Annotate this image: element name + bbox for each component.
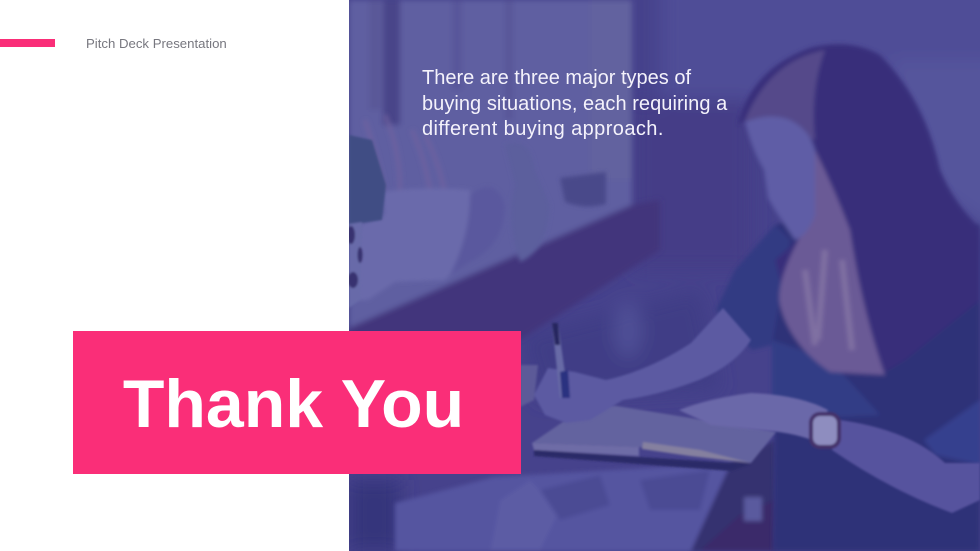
intro paragraph: buying situations, each requiring a	[422, 92, 727, 114]
window and sill	[349, 0, 660, 340]
deck label: Pitch Deck Presentation	[86, 36, 227, 51]
left hand and forearm with watch	[679, 393, 980, 513]
plants and pots on the sill	[355, 115, 606, 300]
patterned leaf plant and spotted pot	[347, 135, 386, 308]
arm, hand and pen	[520, 308, 751, 423]
photo panel: woman writing at a table	[349, 0, 980, 551]
title: Thank You	[123, 366, 464, 442]
intro paragraph: different buying approach.	[422, 118, 664, 140]
accent bar	[0, 39, 55, 47]
intro paragraph: There are three major types of	[422, 67, 691, 89]
table	[395, 440, 775, 551]
title banner	[73, 331, 521, 474]
woman: body and hair	[716, 44, 980, 551]
intro paragraph	[422, 67, 728, 140]
background wall and table glow	[349, 0, 980, 551]
notebook	[532, 402, 776, 471]
